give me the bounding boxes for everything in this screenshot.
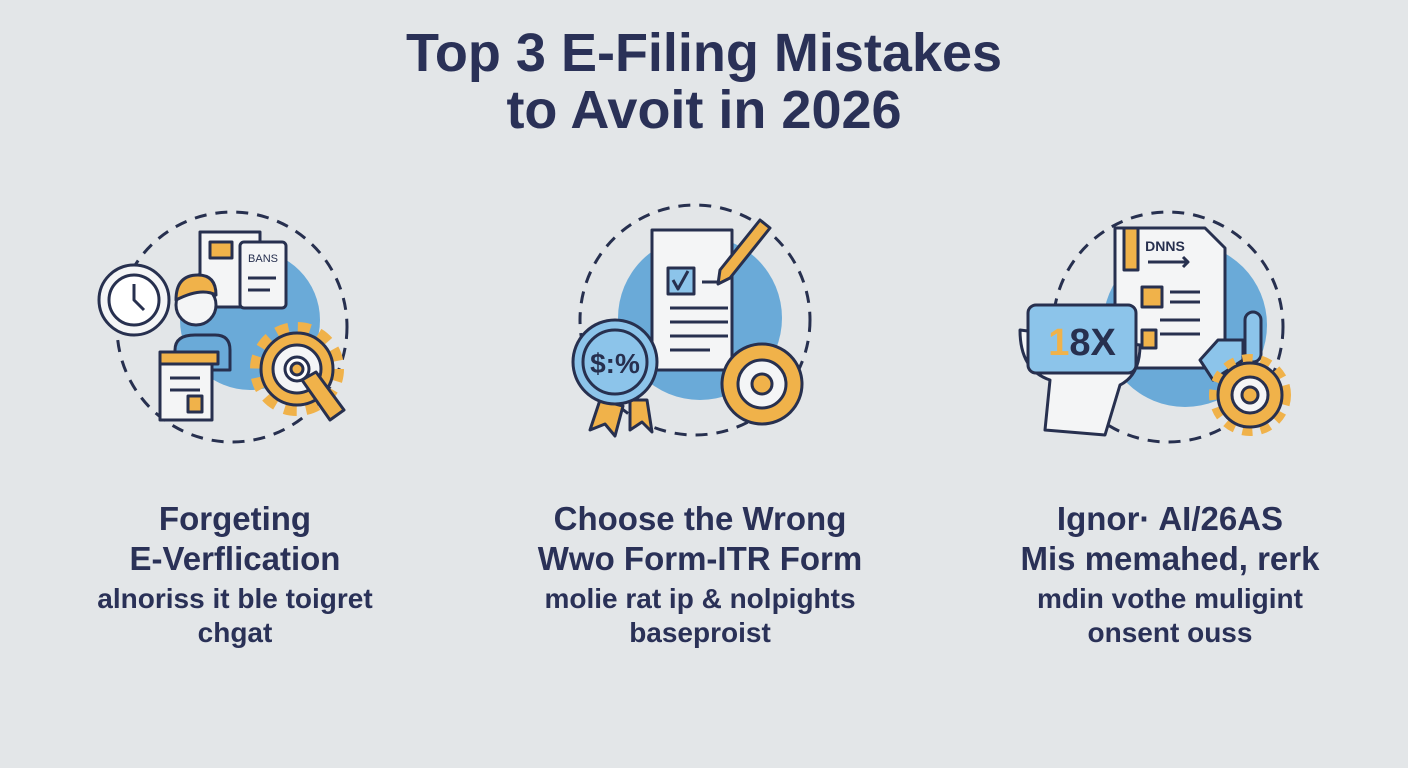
icon: ignore AIS/26AS (1020, 212, 1286, 442)
column 3 text: mdin vothe muligint (1037, 583, 1303, 614)
column 1 text: chgat (198, 617, 272, 648)
column 1 text (97, 500, 373, 648)
column 3 text: onsent ouss (1088, 617, 1252, 648)
icon: ignore AIS/26AS: 18X (1048, 322, 1116, 364)
column 2 text (538, 500, 862, 648)
icon: forgetting e-verification: BANS (248, 253, 278, 265)
title: Top 3 E-Filing Mistakes (406, 23, 1002, 83)
column 2 text: molie rat ip & nolpights (544, 583, 856, 614)
icon: forgetting e-verification (99, 212, 347, 442)
column 3 text: Ignor· AI/26AS (1057, 500, 1283, 537)
column 1 text: alnoriss it ble toigret (97, 583, 373, 614)
column 1 text: Forgeting (159, 500, 311, 537)
title (406, 23, 1002, 140)
icon: ignore AIS/26AS: DNNS (1145, 238, 1185, 254)
icon: choose wrong form: $:% (590, 348, 640, 379)
column 2 text: Choose the Wrong (554, 500, 846, 537)
column 2 text: baseproist (629, 617, 771, 648)
column 1 text: E-Verflication (130, 540, 340, 577)
column 2 text: Wwo Form-ITR Form (538, 540, 862, 577)
column 3 text: Mis memahed, rerk (1021, 540, 1319, 577)
title: to Avoit in 2026 (506, 80, 902, 140)
icon: choose wrong form (573, 205, 810, 436)
column 3 text (1021, 500, 1320, 648)
